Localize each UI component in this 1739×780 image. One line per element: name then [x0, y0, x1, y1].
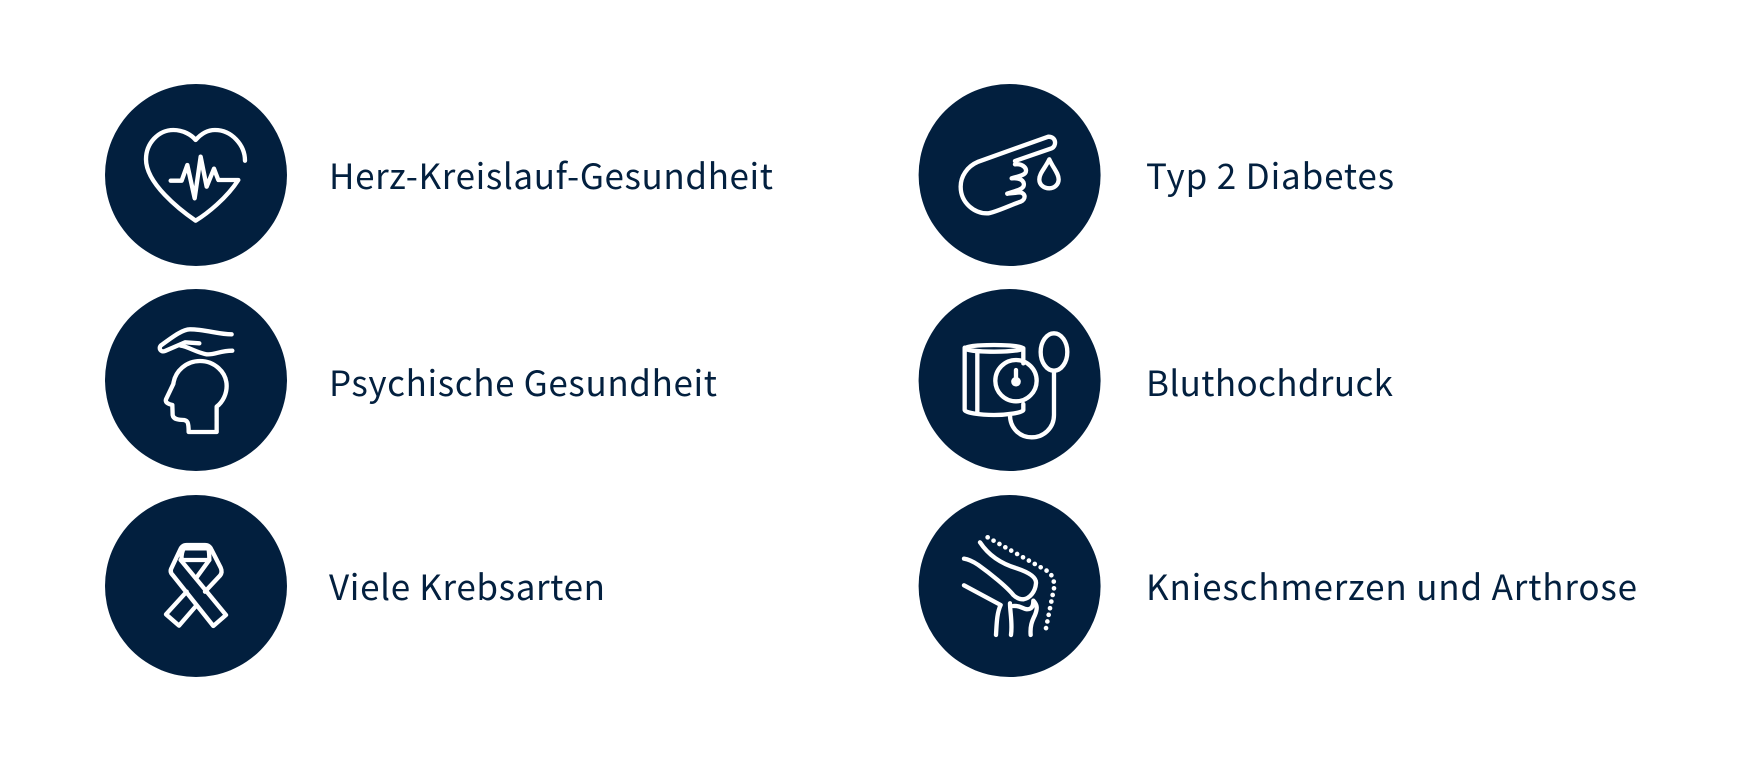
label: Herz-Kreislauf-Gesundheit: Herz-Kreislauf-Gesundheit [329, 149, 773, 200]
label: Viele Krebsarten: Viele Krebsarten [329, 560, 605, 611]
label: Psychische Gesundheit: Psychische Gesundheit [329, 356, 717, 407]
item: Herz-Kreislauf-Gesundheit [105, 84, 773, 266]
item: Knieschmerzen und Arthrose [919, 495, 1637, 677]
label: Bluthochdruck: Bluthochdruck [1146, 356, 1393, 407]
item: Psychische Gesundheit [105, 289, 717, 471]
icon: hand over head [105, 289, 287, 471]
icon: finger with blood drop [919, 84, 1101, 266]
label: Knieschmerzen und Arthrose: Knieschmerzen und Arthrose [1146, 560, 1637, 611]
icon: blood pressure cuff [919, 289, 1101, 471]
icon: heart with pulse [105, 84, 287, 266]
item: Typ 2 Diabetes [919, 84, 1394, 266]
item: Bluthochdruck [919, 289, 1393, 471]
item: Viele Krebsarten [105, 495, 605, 677]
icon: awareness ribbon [105, 495, 287, 677]
icon: knee joint [919, 495, 1101, 677]
label: Typ 2 Diabetes: Typ 2 Diabetes [1146, 149, 1394, 200]
